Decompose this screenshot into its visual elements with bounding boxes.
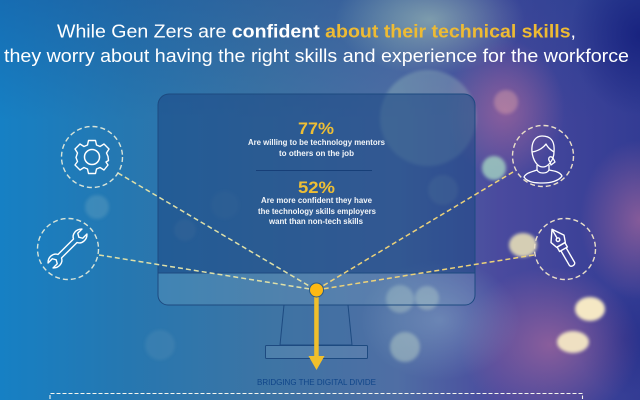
dashed panel edge [50,394,582,399]
icon: wrench [38,218,98,280]
stat: 52% [258,178,377,226]
monitor base [266,346,368,358]
stat: 77%: Are willing to be technology mentors [248,138,386,147]
title [4,20,629,66]
stat: 52%: the technology skills employers [258,207,377,216]
icon: pen nib [534,218,596,280]
monitor [158,94,475,358]
icon: person with headset [512,126,574,186]
subheading: BRIDGING THE DIGITAL DIVIDE [257,378,376,387]
central dot and arrow [308,283,324,370]
monitor chin [158,273,475,305]
stat: 52%: 52% [298,178,335,197]
dashed connectors [99,172,534,290]
monitor screen [158,94,475,273]
stat: 52%: want than non-tech skills [268,217,364,226]
stat: 52%: Are more confident they have [261,196,373,205]
title: they worry about having the right skills and experience for the workforce [4,45,629,66]
stat: 77% [248,119,386,158]
stat: 77%: to others on the job [279,149,354,158]
stat: 77%: 77% [298,119,334,138]
icon: gear [62,126,122,188]
title: While Gen Zers are confident about their technical skills , [57,20,576,42]
monitor stand [280,305,352,345]
